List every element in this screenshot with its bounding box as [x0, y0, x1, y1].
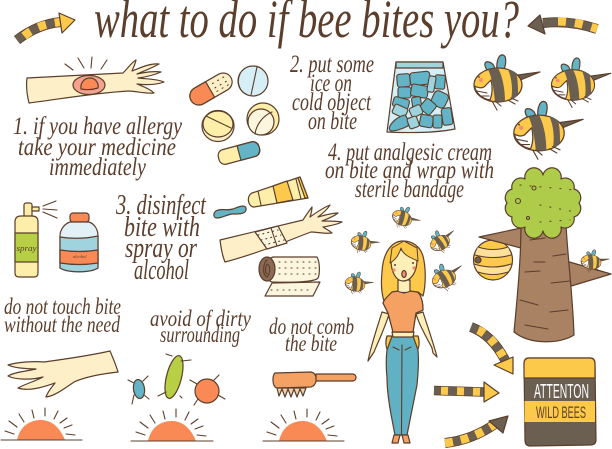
tip: dirt text: avoid of dirty: [150, 306, 252, 331]
step 4 text: 4. put analgesic cream: [328, 139, 492, 166]
bee 2: [551, 58, 611, 108]
tip: dirt text: [150, 306, 252, 347]
arrow: down right: [471, 327, 513, 374]
sun 3: [263, 409, 344, 441]
step 4 text: sterile bandage: [355, 176, 464, 203]
tip: comb text: [269, 314, 354, 356]
sun 2: [131, 409, 213, 441]
step 1 text: immediately: [49, 154, 147, 181]
beehive: [474, 240, 512, 280]
arrow: right: [434, 382, 499, 402]
tip: comb text: do not comb: [269, 314, 354, 339]
tip: comb text: the bite: [285, 331, 337, 356]
tip: do not touch text: without the need: [4, 312, 120, 337]
warning sign: [524, 358, 596, 446]
spray bottle: [15, 201, 57, 277]
tip: do not touch text: [4, 294, 121, 337]
step 1 text: 1. if you have allergy: [13, 113, 183, 140]
step 3 text: spray or: [125, 233, 197, 264]
tree: [479, 168, 611, 342]
step 1: arm with bite: [27, 57, 164, 103]
arrow: top left: [17, 13, 75, 40]
arrow: up right: [445, 416, 508, 443]
step 2 text: cold object: [292, 89, 372, 116]
step 4 text: [325, 139, 494, 203]
step 3 text: alcohol: [134, 255, 189, 286]
tip: do not touch text: do not touch bite: [4, 294, 121, 319]
step 2 text: 2. put some: [290, 51, 374, 78]
step 3 text: 3. disinfect: [115, 190, 207, 221]
step 2 text: on bite: [308, 108, 357, 135]
bandage roll: [259, 257, 320, 296]
comb: [273, 372, 356, 397]
bee 3: [514, 101, 583, 159]
alcohol jar: [60, 213, 98, 272]
small bees: [343, 202, 468, 298]
cream tube: [214, 177, 308, 218]
arrow: top right: [528, 15, 597, 34]
step 4 text: on bite and wrap with: [325, 157, 494, 184]
tip: dirt text: surrounding: [160, 322, 240, 347]
spray bottle: spray: [16, 244, 37, 253]
sun 1: [1, 408, 82, 440]
alcohol jar: alcohol: [73, 254, 87, 259]
pills: [187, 66, 279, 166]
step 3 text: [115, 190, 207, 286]
bandaged arm: [220, 205, 342, 262]
step 2 text: ice on: [310, 70, 352, 97]
ice bag: [387, 62, 455, 133]
girl: [368, 241, 437, 443]
hand: [8, 351, 118, 397]
step 3 text: bite with: [124, 212, 200, 243]
bee 1: [474, 55, 540, 110]
step 1 text: [13, 113, 183, 181]
step 1 text: take your medicine: [18, 134, 176, 161]
bugs: [128, 354, 225, 405]
tree bee: [580, 248, 610, 275]
step 2 text: [290, 51, 374, 135]
